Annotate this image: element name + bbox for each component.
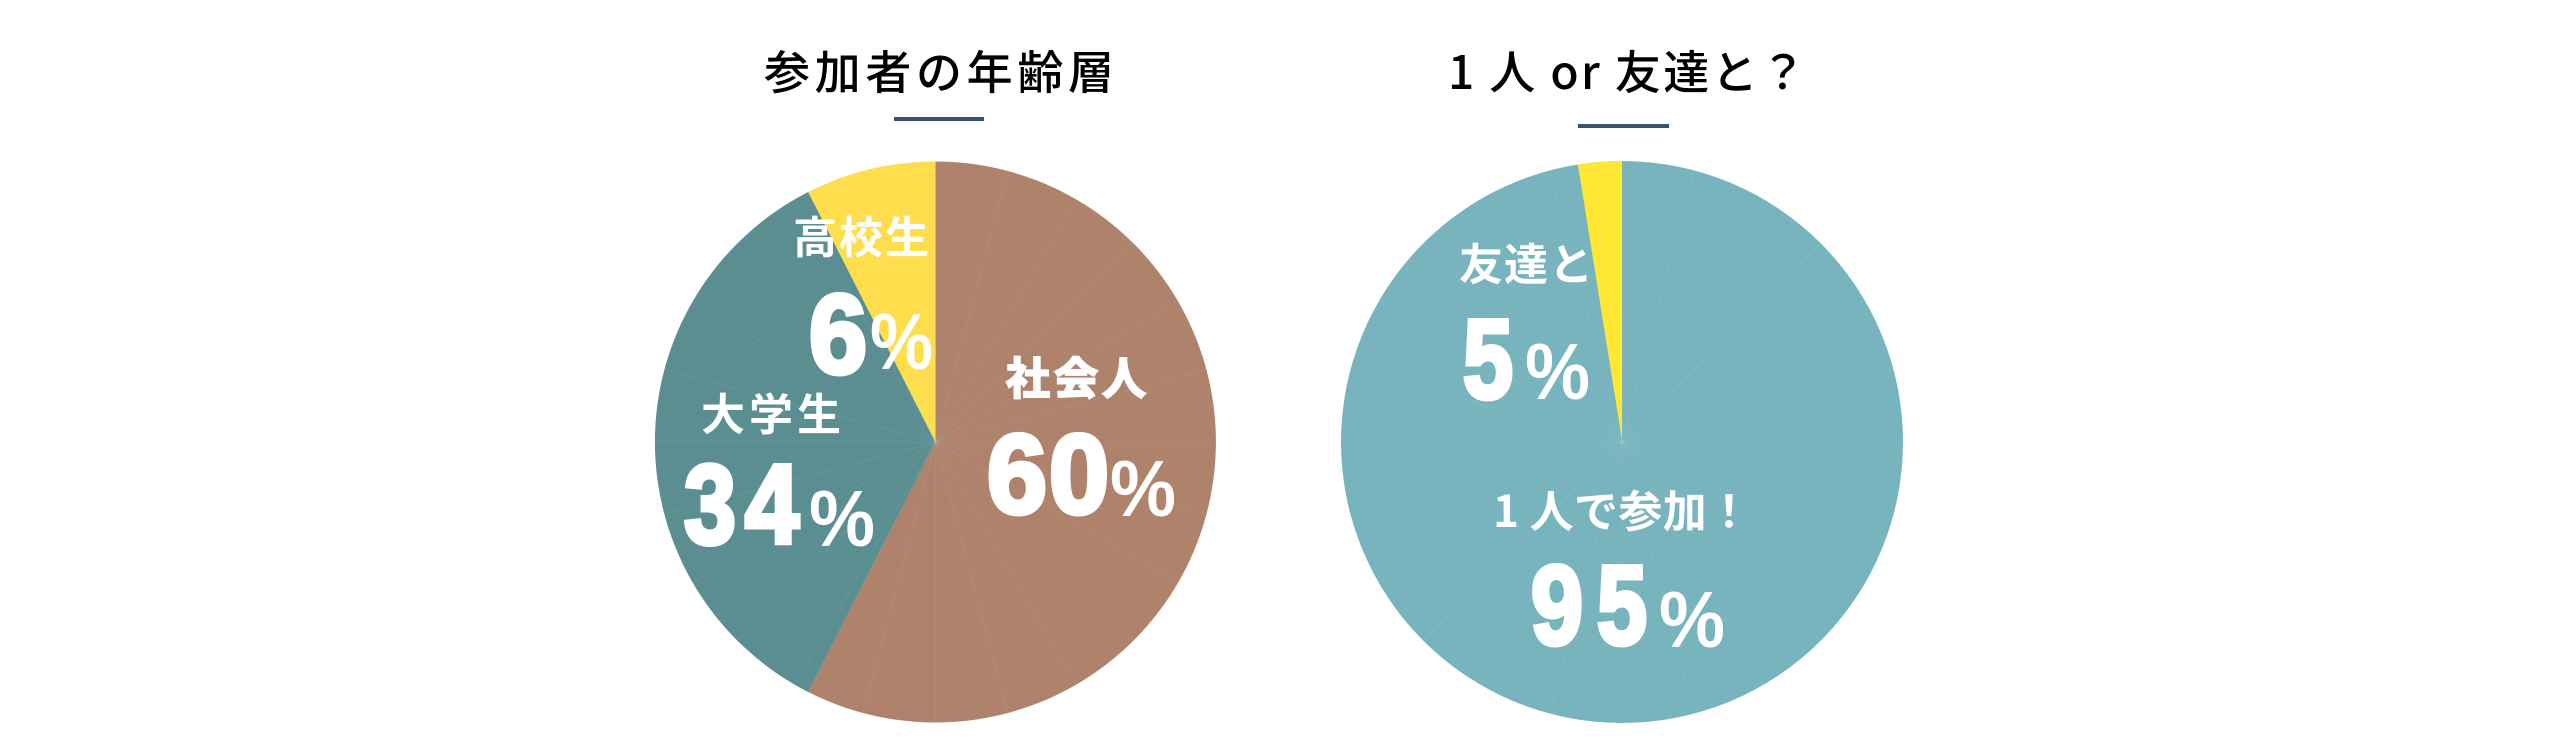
slice: with friends 5% [1578, 161, 1622, 440]
label: working adults: % [1110, 444, 1176, 533]
heading: age of participants: 参加者の年齢層 [764, 37, 1114, 103]
label: university students: 大学生 [701, 379, 841, 443]
pie chart: alone or with friends [1341, 161, 1903, 723]
heading underline [1578, 124, 1669, 128]
label: with friends [1459, 229, 1593, 422]
label: high school students: 高校生 [793, 202, 929, 266]
label: with friends: 5 [1463, 297, 1513, 422]
label: university students: % [809, 474, 875, 563]
label: working adults: 0 [1049, 412, 1109, 537]
label: participated alone: % [1659, 575, 1725, 664]
label: high school students [793, 202, 933, 397]
label: with friends: % [1525, 327, 1590, 416]
label: participated alone [1493, 476, 1751, 668]
heading underline [894, 117, 984, 121]
label: participated alone: 5 [1597, 543, 1647, 668]
label: university students: 3 [684, 442, 736, 567]
label: participated alone: 9 [1531, 543, 1583, 668]
label: high school students: % [870, 297, 933, 386]
panel: alone or with friends [1341, 37, 1903, 723]
label: working adults [987, 343, 1176, 537]
slice: alone 95% [1341, 161, 1903, 723]
panel: age of participants [655, 37, 1216, 722]
label: working adults: 6 [987, 412, 1047, 537]
label: high school students: 6 [809, 272, 867, 397]
heading: alone or with friends: 1 人 or 友達と？ [1448, 37, 1806, 103]
label: working adults: 社会人 [1006, 343, 1146, 407]
slice: working adults 60% [808, 162, 1216, 722]
slice: university students 34% [655, 192, 936, 692]
label: university students: 4 [745, 442, 799, 567]
slice: high school students 6% [808, 161, 936, 442]
pie chart: age groups [655, 161, 1216, 722]
label: with friends: 友達と [1459, 229, 1593, 293]
label: university students [684, 379, 875, 567]
label: participated alone: 1 人で参加！ [1493, 476, 1751, 540]
